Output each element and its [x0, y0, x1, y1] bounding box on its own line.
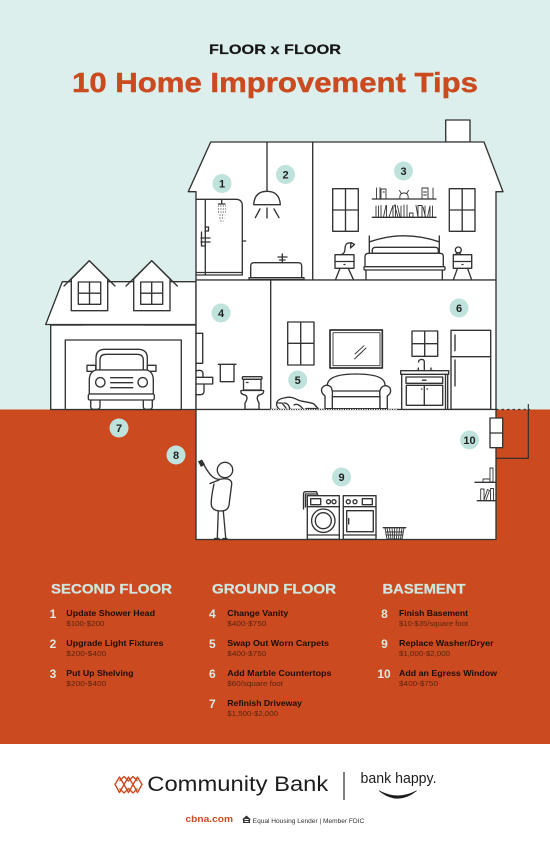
- tip 6: [209, 667, 332, 688]
- number marker 1: [212, 174, 232, 193]
- number marker 6: [450, 298, 468, 318]
- dog on carpet: [277, 397, 318, 409]
- heading: second floor: SECOND FLOOR: [51, 582, 172, 596]
- number marker 9: [332, 468, 351, 486]
- living room window: [288, 322, 314, 365]
- number marker 4: 4: [218, 308, 225, 320]
- tip 9: 9: [381, 637, 388, 651]
- tip 8: [381, 607, 468, 628]
- tip 1: [50, 607, 155, 628]
- tip 6: Add Marble Countertops: [227, 668, 332, 678]
- car: [87, 349, 156, 409]
- tip 7: Refinish Driveway: [227, 698, 302, 708]
- tip 2: Upgrade Light Fixtures: [66, 638, 164, 648]
- tip 5: Swap Out Worn Carpets: [227, 638, 329, 648]
- number marker 2: [276, 165, 295, 184]
- number marker 7: 7: [116, 423, 122, 435]
- tip 2: [50, 637, 164, 658]
- title: 10 Home Improvement Tips: [72, 67, 478, 98]
- icon: equal housing: [242, 816, 251, 823]
- tip 4: 4: [209, 607, 216, 621]
- shelves with books: [372, 188, 436, 217]
- icon: community bank logo: [115, 776, 142, 793]
- number marker 5: [288, 370, 307, 390]
- sofa: [321, 374, 391, 409]
- footer background: [0, 744, 550, 850]
- dryer: [343, 496, 376, 539]
- nightstand right with clock: [453, 247, 472, 279]
- dormer right: [126, 261, 177, 311]
- mirror: [196, 333, 203, 363]
- tip 1: Update Shower Head: [66, 608, 155, 618]
- tip 9: Replace Washer/Dryer: [399, 638, 494, 648]
- tip 7: [209, 697, 302, 718]
- kitchen window: [412, 331, 438, 356]
- kitchen cabinet: [401, 359, 449, 409]
- number marker 3: 3: [400, 166, 407, 178]
- tip 9: [381, 637, 494, 658]
- tip 5: $400-$750: [227, 651, 266, 658]
- towel: [218, 364, 236, 382]
- number marker 9: 9: [338, 472, 345, 484]
- number marker 10: [460, 430, 479, 450]
- tip 3: [50, 667, 134, 688]
- tip 10: $400-$750: [399, 681, 438, 688]
- tip 10: 10: [377, 667, 391, 681]
- footer: [115, 771, 436, 825]
- tip 9: $1,000-$2,000: [399, 651, 450, 658]
- tip 10: [377, 667, 497, 688]
- heading: ground floor: GROUND FLOOR: [212, 582, 336, 596]
- sky background: [0, 0, 550, 410]
- divider: [343, 772, 345, 800]
- tip 3: 3: [50, 667, 57, 681]
- legal text: Equal Housing Lender | Member FDIC: [253, 818, 365, 825]
- number marker 1: 1: [219, 178, 225, 190]
- tip 7: $1,500-$2,000: [227, 711, 278, 718]
- number marker 8: 8: [173, 450, 179, 462]
- tip 3: Put Up Shelving: [66, 668, 134, 678]
- washer: [304, 492, 339, 539]
- panel: basement list: [377, 582, 497, 688]
- number marker 2: 2: [282, 170, 289, 182]
- garage structure: [46, 282, 196, 410]
- ground and list panel: [0, 410, 550, 744]
- tip 1: $100-$200: [66, 621, 104, 628]
- panel: second floor list: [50, 582, 172, 688]
- pedestal sink: [196, 370, 213, 395]
- website: cbna.com: [186, 814, 233, 824]
- garage: [46, 261, 196, 410]
- number marker 8: [166, 446, 186, 464]
- refrigerator: [451, 330, 491, 409]
- main house shell: [188, 120, 503, 540]
- tip 1: 1: [50, 607, 57, 621]
- nightstand left with lamp: [335, 242, 354, 279]
- tip 2: $200-$400: [66, 651, 106, 658]
- bathroom fixtures: [196, 333, 264, 409]
- toilet: [241, 377, 264, 409]
- tip 7: 7: [209, 697, 216, 711]
- dormer left: [64, 261, 115, 311]
- vanity sink: [249, 254, 304, 280]
- heading: basement: BASEMENT: [382, 582, 466, 596]
- tip 6: 6: [209, 667, 216, 681]
- icon: smile: [379, 791, 417, 798]
- egress window: [490, 404, 530, 458]
- bedroom windows: [333, 189, 475, 231]
- heading: floor x floor: FLOOR x FLOOR: [209, 41, 341, 57]
- tip 6: $60/square foot: [227, 681, 283, 688]
- community bank wordmark: Community Bank: [147, 773, 329, 796]
- tip 4: $400-$750: [227, 621, 266, 628]
- shower: [196, 199, 246, 275]
- number marker 10: 10: [463, 435, 476, 447]
- tip 8: $10-$35/square foot: [399, 621, 468, 628]
- laundry basket: [383, 528, 406, 539]
- number marker 5: 5: [295, 375, 301, 387]
- number marker 7: [110, 418, 128, 438]
- tip 8: 8: [381, 607, 388, 621]
- tip 2: 2: [50, 637, 57, 651]
- basement shelves: [475, 468, 496, 501]
- picture mirror: [330, 330, 382, 368]
- number marker 3: [394, 162, 413, 180]
- house illustration: [46, 120, 530, 540]
- tip 10: Add an Egress Window: [399, 668, 497, 678]
- number marker 4: [212, 304, 230, 322]
- tip 4: Change Vanity: [227, 608, 289, 618]
- tip 4: [209, 607, 289, 628]
- tip 5: 5: [209, 637, 216, 651]
- bed: [364, 236, 445, 279]
- number marker 6: 6: [456, 303, 462, 315]
- ceiling lamp: [254, 142, 280, 218]
- tip 8: Finish Basement: [399, 608, 468, 618]
- bank happy slogan: bank happy.: [360, 771, 436, 787]
- carpet dotted line: [271, 408, 397, 410]
- panel: ground floor list: [209, 582, 336, 718]
- tip 3: $200-$400: [66, 681, 106, 688]
- person painting: [198, 460, 233, 538]
- tip 5: [209, 637, 329, 658]
